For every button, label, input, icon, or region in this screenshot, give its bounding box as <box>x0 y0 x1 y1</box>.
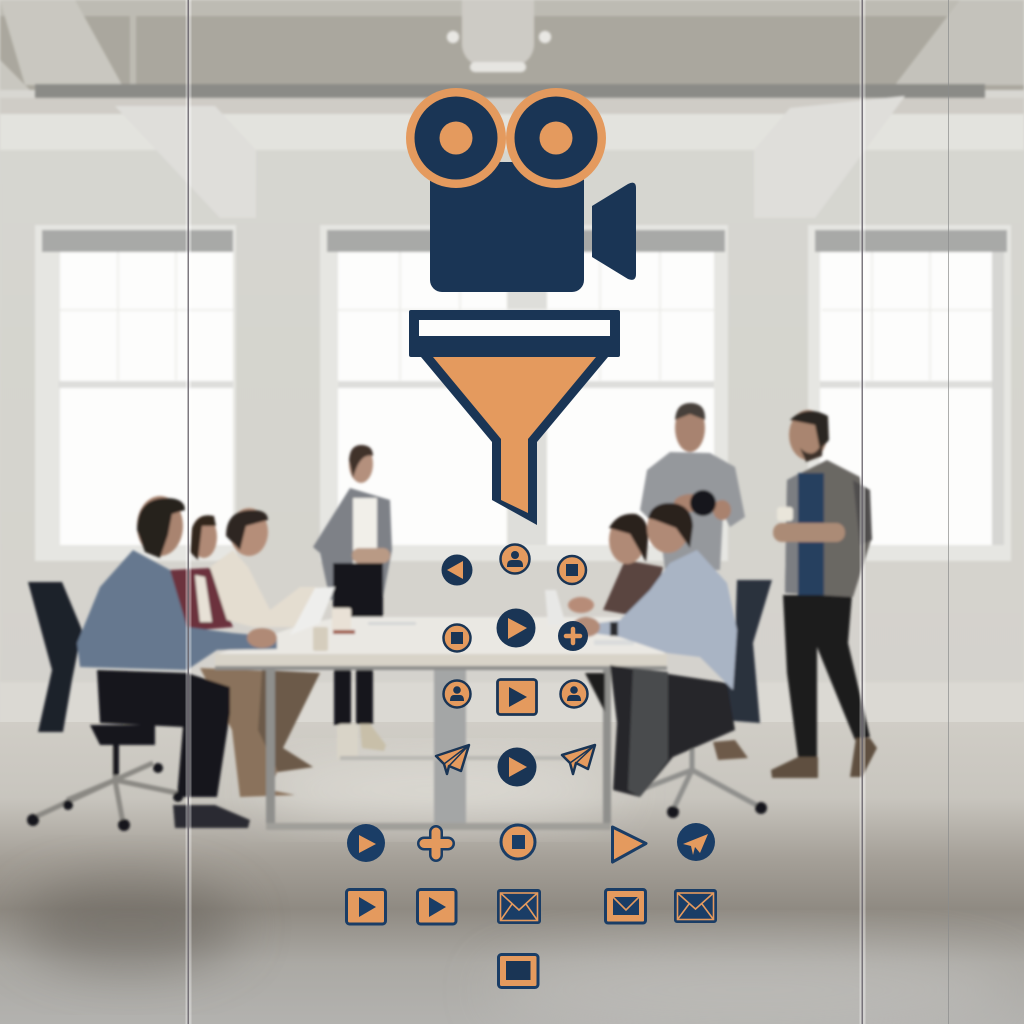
icon group: row 4 <box>436 745 595 786</box>
standing woman <box>313 445 392 760</box>
icon: play circle <box>496 608 536 648</box>
back left man <box>200 508 320 797</box>
icon: play circle <box>347 824 385 862</box>
icon: user circle <box>560 680 588 708</box>
icon: funnel <box>409 310 620 525</box>
icon: rewind circle <box>442 554 472 586</box>
icon: play circle <box>498 748 536 786</box>
left reel <box>406 88 506 188</box>
table top, laptop and cups <box>215 587 667 670</box>
icon: user circle <box>500 544 530 574</box>
floor <box>0 722 1024 1024</box>
icon: stop circle <box>501 825 535 859</box>
icon group: row 3 <box>444 680 588 714</box>
icon: stop circle <box>444 624 470 652</box>
camera lens <box>592 183 636 280</box>
right standing man with camera <box>640 403 745 570</box>
icon: plus circle <box>558 621 588 651</box>
ceiling and wall <box>0 0 1024 725</box>
glass reflection lines <box>186 0 949 1024</box>
back left woman <box>170 515 233 632</box>
icon: envelope <box>606 890 646 923</box>
seated man left with chair <box>27 496 277 831</box>
icon group: row 5 <box>347 823 715 862</box>
icon: user circle <box>444 680 470 708</box>
right reel <box>506 88 606 188</box>
icon: paper plane <box>562 745 595 774</box>
table legs <box>266 664 611 830</box>
seated man right with chair <box>572 503 772 818</box>
icon: play triangle <box>612 827 646 862</box>
camera body <box>430 162 584 292</box>
icon group: row 1 <box>442 544 586 586</box>
icon: plus <box>424 832 448 855</box>
icon: stop square <box>498 954 538 988</box>
scene: meeting people and table <box>27 403 877 831</box>
icon: play square <box>346 890 386 924</box>
icon group: row 2 <box>444 608 588 652</box>
icon: plane circle <box>677 823 715 861</box>
icon: stop circle <box>558 556 586 584</box>
icon group: row 6 <box>346 890 716 924</box>
icon: play square <box>418 890 456 924</box>
icon: video camera <box>406 88 636 292</box>
far right man <box>771 410 877 778</box>
icon: envelope <box>675 890 716 922</box>
seated woman right <box>585 514 663 712</box>
windows <box>35 225 1011 561</box>
icon: play square <box>498 680 536 714</box>
icon: paper plane <box>436 745 469 774</box>
icon: envelope <box>498 890 540 923</box>
